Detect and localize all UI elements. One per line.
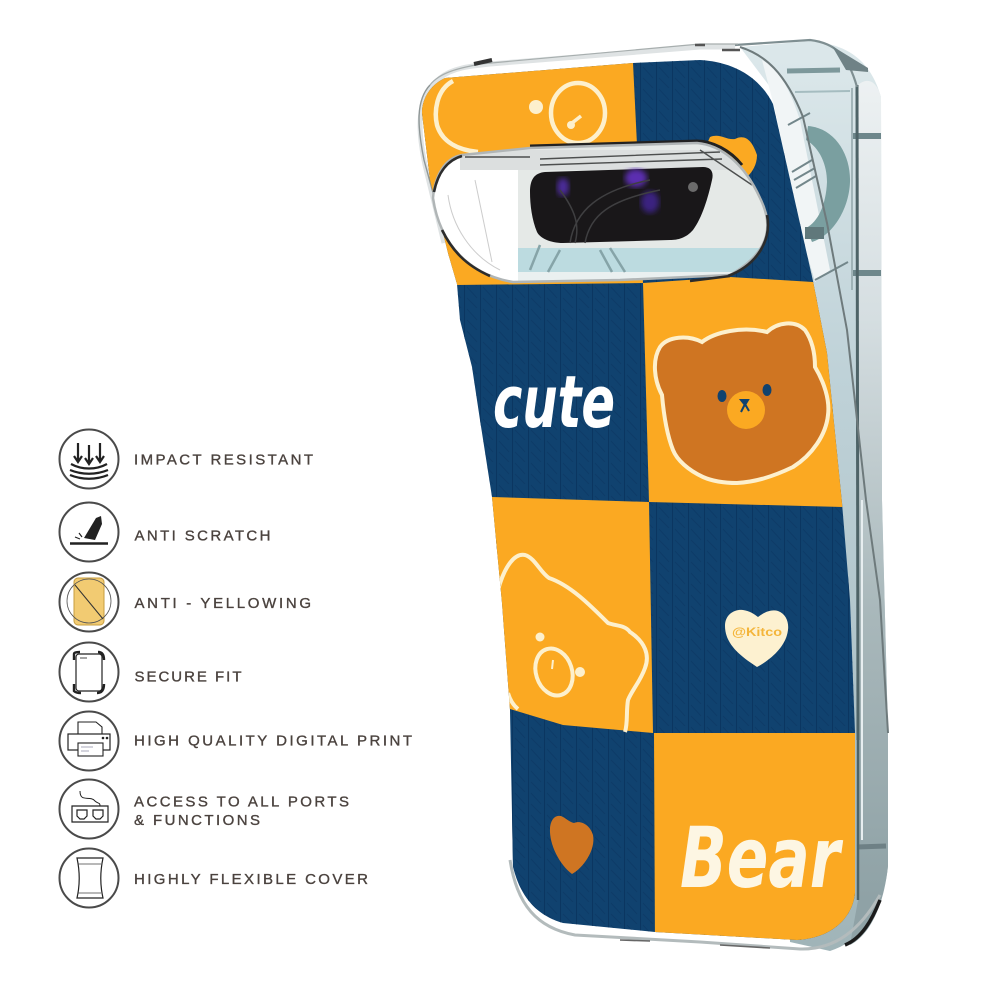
top bear outline xyxy=(436,81,605,152)
feature: impact resistant: IMPACT RESISTANT xyxy=(134,452,313,468)
feature: anti scratch xyxy=(60,502,270,562)
feature: anti yellowing xyxy=(60,572,311,632)
text: Bear: Bear xyxy=(680,809,843,907)
text: cute: cute xyxy=(493,360,615,444)
white heart with logo xyxy=(725,610,788,667)
feature: high quality digital print xyxy=(60,712,412,770)
clear case rim xyxy=(419,44,880,949)
feature: impact resistant xyxy=(60,430,313,488)
lower bear outline xyxy=(498,555,647,732)
brown heart xyxy=(550,816,593,874)
feature: secure fit: SECURE FIT xyxy=(134,668,242,686)
phone case back behind the print xyxy=(735,40,888,951)
camera cut-out xyxy=(433,140,780,285)
feature: highly flexible cover xyxy=(60,848,368,908)
feature: access to all ports and functions xyxy=(60,780,349,838)
large brown bear face xyxy=(655,323,828,483)
orange checker cells xyxy=(410,55,870,950)
feature: access to all ports and functions: ACCESS TO ALL PORTS xyxy=(134,794,349,810)
printed cover xyxy=(410,50,870,950)
feature: anti scratch: ANTI SCRATCH xyxy=(134,528,270,544)
feature list xyxy=(60,430,412,908)
feature: access to all ports and functions: & FUNCTIONS xyxy=(134,812,260,829)
teal camera ring xyxy=(806,126,850,242)
lens xyxy=(530,167,713,243)
white heart with logo: @Kitco xyxy=(732,625,782,639)
feature: anti yellowing: ANTI - YELLOWING xyxy=(134,595,311,612)
lattice inside the clear case xyxy=(762,60,830,282)
feature: highly flexible cover: HIGHLY FLEXIBLE COVER xyxy=(134,871,368,888)
ear on navy xyxy=(707,136,757,176)
feature: secure fit xyxy=(60,642,242,702)
feature: high quality digital print: HIGH QUALITY DIGITAL PRINT xyxy=(134,732,412,750)
